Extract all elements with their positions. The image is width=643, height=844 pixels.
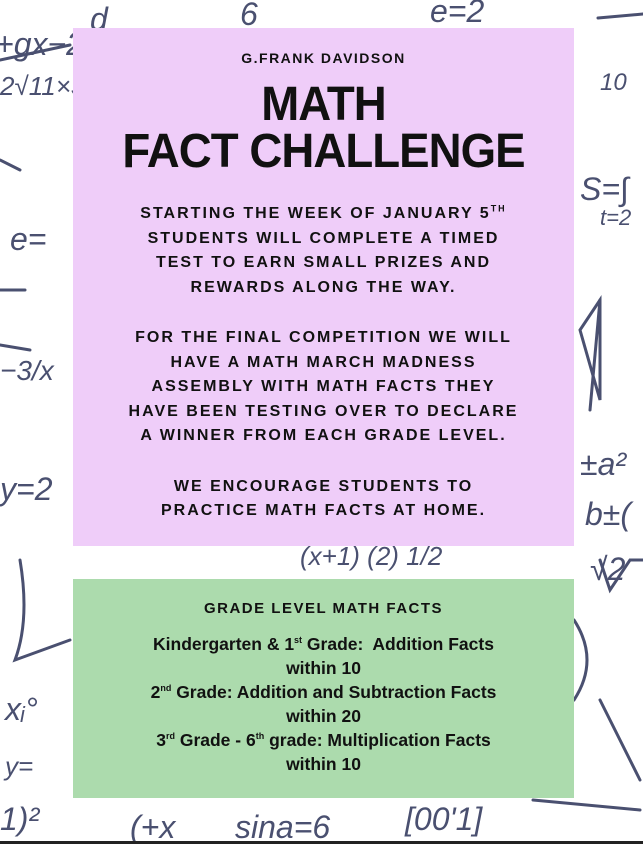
text: encouragement: PRACTICE MATH FACTS AT HOME. (161, 502, 486, 519)
list of facts: 2nd Grade: Addition and Subtraction Facts (151, 682, 496, 702)
background math scribbles: (+x (130, 809, 176, 844)
panel: grade level facts (73, 579, 574, 798)
panel: announcement (73, 28, 574, 546)
text: final competition: FOR THE FINAL COMPETITION WE WILL (135, 329, 512, 346)
background math scribbles: −3/x (0, 355, 55, 386)
background math scribbles: xᵢ° (3, 691, 38, 727)
background math scribbles: y=2 (0, 471, 53, 507)
title (122, 78, 525, 178)
background math scribbles: sina=6 (235, 809, 330, 844)
background math scribbles: 1)² (0, 801, 40, 837)
background math scribbles: b±( (585, 496, 634, 532)
background math scribbles: e= (10, 221, 46, 257)
list of facts: within 10 (286, 658, 361, 678)
school name: G.FRANK DAVIDSON (241, 50, 406, 66)
title: FACT CHALLENGE (122, 125, 525, 178)
text: encouragement: WE ENCOURAGE STUDENTS TO (174, 478, 473, 494)
title: MATH (261, 78, 386, 131)
background math scribbles: 2√11×3 (0, 71, 86, 101)
text: final competition (129, 329, 518, 444)
heading: GRADE LEVEL MATH FACTS (204, 600, 443, 617)
text: intro: REWARDS ALONG THE WAY. (191, 278, 456, 296)
background math scribbles: d (90, 1, 109, 37)
text: final competition: HAVE BEEN TESTING OVER TO DECLARE (129, 402, 518, 420)
background math scribbles: S=∫ (580, 171, 631, 208)
background math scribbles: 10 (600, 69, 627, 96)
list of facts: 3rd Grade - 6th grade: Multiplication Facts (156, 730, 491, 750)
text: intro (140, 204, 507, 296)
text: final competition: ASSEMBLY WITH MATH FACTS THEY (152, 378, 495, 395)
background math scribbles: t=2 (600, 205, 631, 230)
list of facts (151, 634, 496, 774)
text: final competition: A WINNER FROM EACH GRADE LEVEL. (140, 427, 507, 444)
text: final competition: HAVE A MATH MARCH MADNESS (170, 354, 476, 370)
list of facts: Kindergarten & 1st Grade: Addition Facts (153, 634, 494, 654)
list of facts: within 10 (286, 754, 361, 774)
bottom black bar (0, 841, 643, 844)
background math scribbles: y= (3, 751, 33, 781)
text: intro: STUDENTS WILL COMPLETE A TIMED (148, 230, 499, 246)
background math scribbles: [00'1] (404, 801, 483, 837)
background math scribbles: ±a² (580, 446, 627, 482)
text: intro: TEST TO EARN SMALL PRIZES AND (156, 254, 491, 271)
text: encouragement (161, 478, 486, 519)
background math scribbles: √2 (590, 551, 626, 587)
list of facts: within 20 (286, 706, 361, 726)
text: intro: STARTING THE WEEK OF JANUARY 5TH (140, 204, 507, 222)
background math scribbles: (x+1) (2) 1/2 (300, 541, 443, 571)
